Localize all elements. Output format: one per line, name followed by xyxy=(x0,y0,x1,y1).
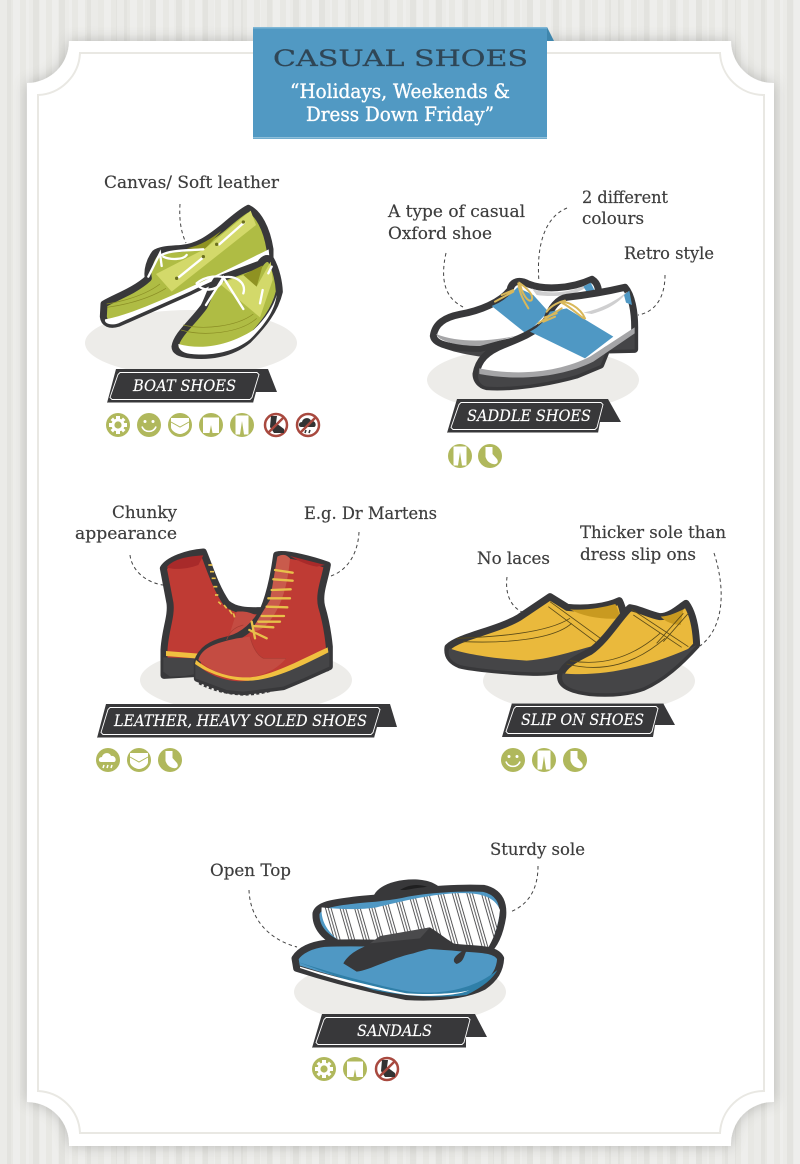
leader line xyxy=(507,577,522,612)
name ribbon: sandals: SANDALS xyxy=(357,1021,432,1040)
floor shadow xyxy=(427,347,639,413)
shoe illustration: sandals xyxy=(295,879,503,997)
annotation: 2 different colours: colours xyxy=(582,209,644,228)
subtitle: Dress Down Friday” xyxy=(306,102,494,126)
leader line xyxy=(510,866,538,912)
icon row: slip ons suitability xyxy=(501,748,587,772)
annotation: No laces: No laces xyxy=(477,549,550,568)
floor shadow xyxy=(140,647,352,713)
annotation: Chunky appearance: Chunky xyxy=(112,503,178,522)
annotation: A type of casual Oxford shoe: A type of casual xyxy=(387,202,525,221)
name ribbon: saddle shoes: SADDLE SHOES xyxy=(467,406,591,425)
shoe illustration: boots xyxy=(163,552,329,694)
name ribbon: sandals xyxy=(312,1014,487,1048)
leader line xyxy=(538,208,567,282)
icon row: sandals suitability xyxy=(312,1057,398,1081)
annotation: Retro style: Retro style xyxy=(624,244,714,263)
leader line xyxy=(638,275,665,315)
floor shadow xyxy=(85,310,297,376)
title banner xyxy=(253,27,554,139)
name ribbon: slip on shoes xyxy=(502,703,675,737)
annotation: Open Top: Open Top xyxy=(210,861,291,880)
subtitle: “Holidays, Weekends & xyxy=(290,79,510,103)
leader line xyxy=(249,890,297,947)
name ribbon: boat shoes xyxy=(107,369,277,403)
panel: saddle shoes xyxy=(387,188,714,468)
annotation: A type of casual Oxford shoe: Oxford shoe xyxy=(388,224,492,243)
icon row: saddle shoes suitability xyxy=(448,444,502,468)
heading: CASUAL SHOES xyxy=(273,47,528,72)
icon row: boots suitability xyxy=(96,748,182,772)
annotation: A type of casual Oxford shoe xyxy=(387,202,525,243)
leader line xyxy=(130,555,163,585)
shoe illustration: boat shoes xyxy=(103,208,279,356)
annotation: Thicker sole than dress slip ons: Thicker sole than xyxy=(580,523,726,542)
name ribbon: slip on shoes: SLIP ON SHOES xyxy=(521,710,644,729)
annotation: E.g. Dr Martens: E.g. Dr Martens xyxy=(304,504,437,523)
floor shadow xyxy=(483,648,695,714)
leader line xyxy=(331,532,359,576)
annotation: Canvas/ Soft leather: Canvas/ Soft leather xyxy=(104,173,279,192)
subtitle xyxy=(290,79,510,126)
annotation: Thicker sole than dress slip ons xyxy=(580,523,726,564)
icon row: boat shoes suitability xyxy=(106,413,319,437)
name ribbon: boat shoes: BOAT SHOES xyxy=(132,376,236,395)
panel: slip on shoes xyxy=(448,523,726,772)
annotation: Thicker sole than dress slip ons: dress slip ons xyxy=(580,545,696,564)
panel: sandals xyxy=(210,840,585,1081)
panel: leather heavy soled shoes xyxy=(75,503,437,772)
panel: boat shoes xyxy=(85,173,319,437)
leader line xyxy=(700,553,721,646)
name ribbon: leather, heavy soled shoes: LEATHER, HEAVY SOLED SHOES xyxy=(113,711,367,730)
annotation: 2 different colours xyxy=(582,188,668,228)
shoe illustration: slip ons xyxy=(448,597,697,693)
shoe illustration: saddle shoes xyxy=(431,279,635,387)
name ribbon: saddle shoes xyxy=(447,399,621,433)
name ribbon: leather, heavy soled shoes xyxy=(97,704,397,738)
annotation: Chunky appearance: appearance xyxy=(75,524,177,543)
annotation: 2 different colours: 2 different xyxy=(582,188,668,207)
leader line xyxy=(180,204,186,243)
leader line xyxy=(444,253,463,307)
floor shadow xyxy=(294,959,506,1025)
annotation: Chunky appearance xyxy=(75,503,178,543)
annotation: Sturdy sole: Sturdy sole xyxy=(490,840,585,859)
